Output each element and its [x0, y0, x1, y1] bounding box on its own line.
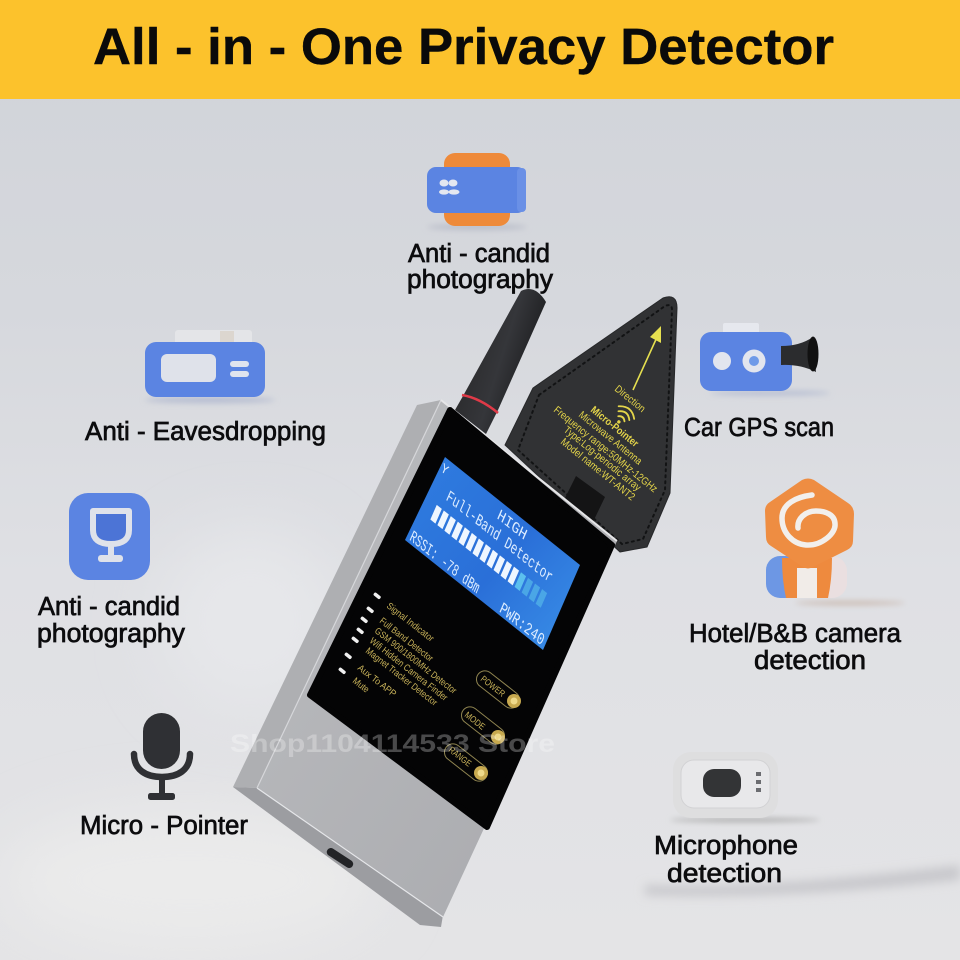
label: car gps scan: Car GPS scan	[684, 414, 834, 442]
lcd screen	[405, 457, 580, 650]
antenna specification text: Micro-Pointer	[588, 404, 641, 450]
label: anti-candid photography top	[407, 240, 553, 294]
label: anti-candid photography top: Anti - candid	[408, 240, 550, 268]
detector mode: Full-Band Detector	[443, 487, 555, 588]
indicator labels: Mute	[350, 676, 371, 695]
label: anti-eavesdropping: Anti - Eavesdropping	[85, 418, 326, 446]
antenna specification text: Type:Log-periodic array	[561, 424, 644, 494]
label: micro-pointer: Micro - Pointer	[80, 812, 249, 840]
power reading: PWR:240	[497, 599, 547, 650]
indicator leds	[338, 592, 381, 675]
direction arrow	[633, 326, 661, 390]
icon: anti-candid photography top	[427, 153, 527, 230]
mode button	[458, 703, 508, 748]
device side edge	[233, 400, 441, 788]
icon: microphone	[134, 713, 190, 800]
indicator labels	[350, 601, 459, 709]
micro-pointer directional antenna	[505, 297, 677, 552]
icon: hotel camera spiral	[765, 478, 905, 605]
antenna specification text: Direction	[612, 383, 648, 415]
icon: wifi symbol	[610, 403, 637, 429]
label: hotel camera detection	[689, 620, 902, 675]
label: anti-candid photography left: photography	[37, 620, 185, 648]
range button	[441, 740, 491, 785]
antenna specification text	[551, 383, 660, 503]
antenna connector	[564, 476, 605, 524]
indicator labels: GSM 900/1800MHz Detector	[372, 626, 459, 697]
signal icon: Y	[439, 460, 451, 479]
title banner	[0, 0, 960, 99]
usb port	[325, 846, 355, 870]
antenna specification text: Microwave Antenna	[576, 409, 644, 468]
indicator labels: Wifi Hidden Camera Finder	[367, 636, 450, 703]
whip antenna	[455, 289, 546, 434]
power button: POWER	[479, 674, 507, 699]
device bottom edge	[233, 787, 443, 927]
label: anti-candid photography left	[37, 593, 185, 648]
range reading: HIGH	[494, 507, 529, 545]
icon: goblet lens	[69, 493, 150, 580]
label: hotel camera detection: Hotel/B&B camera	[689, 620, 902, 648]
signal bars	[430, 505, 547, 608]
icon: anti-eavesdropping	[145, 330, 275, 403]
rssi reading: RSSI: -78 dBm	[407, 528, 482, 598]
label: microphone detection: detection	[667, 860, 782, 888]
indicator labels: Full Band Detector	[377, 616, 435, 664]
antenna specification text: Frequency range:50MHz-12GHz	[551, 404, 660, 495]
label: anti-candid photography left: Anti - candid	[38, 593, 180, 621]
indicator labels: Signal Indicator	[384, 601, 436, 644]
black control panel	[310, 410, 612, 827]
detector device body	[233, 400, 617, 927]
indicator labels: Magnet Tracker Detector	[363, 646, 439, 709]
mode button: MODE	[463, 710, 487, 732]
title: All - in - One Privacy Detector	[93, 18, 834, 75]
icon: microphone detection device	[670, 752, 820, 822]
antenna specification text: Model name:WT-ANT2	[558, 436, 637, 503]
label: anti-candid photography top: photography	[407, 266, 553, 294]
label: hotel camera detection: detection	[754, 647, 866, 675]
red ring	[462, 395, 498, 413]
watermark: Shop1104114533 Store	[230, 730, 555, 758]
device front face	[257, 400, 617, 917]
indicator labels: Aux To APP	[355, 663, 398, 700]
range button: RANGE	[447, 745, 473, 769]
label: microphone detection	[654, 832, 798, 888]
label: microphone detection: Microphone	[654, 832, 798, 860]
icon: video camera	[700, 323, 830, 396]
power button	[473, 667, 523, 712]
